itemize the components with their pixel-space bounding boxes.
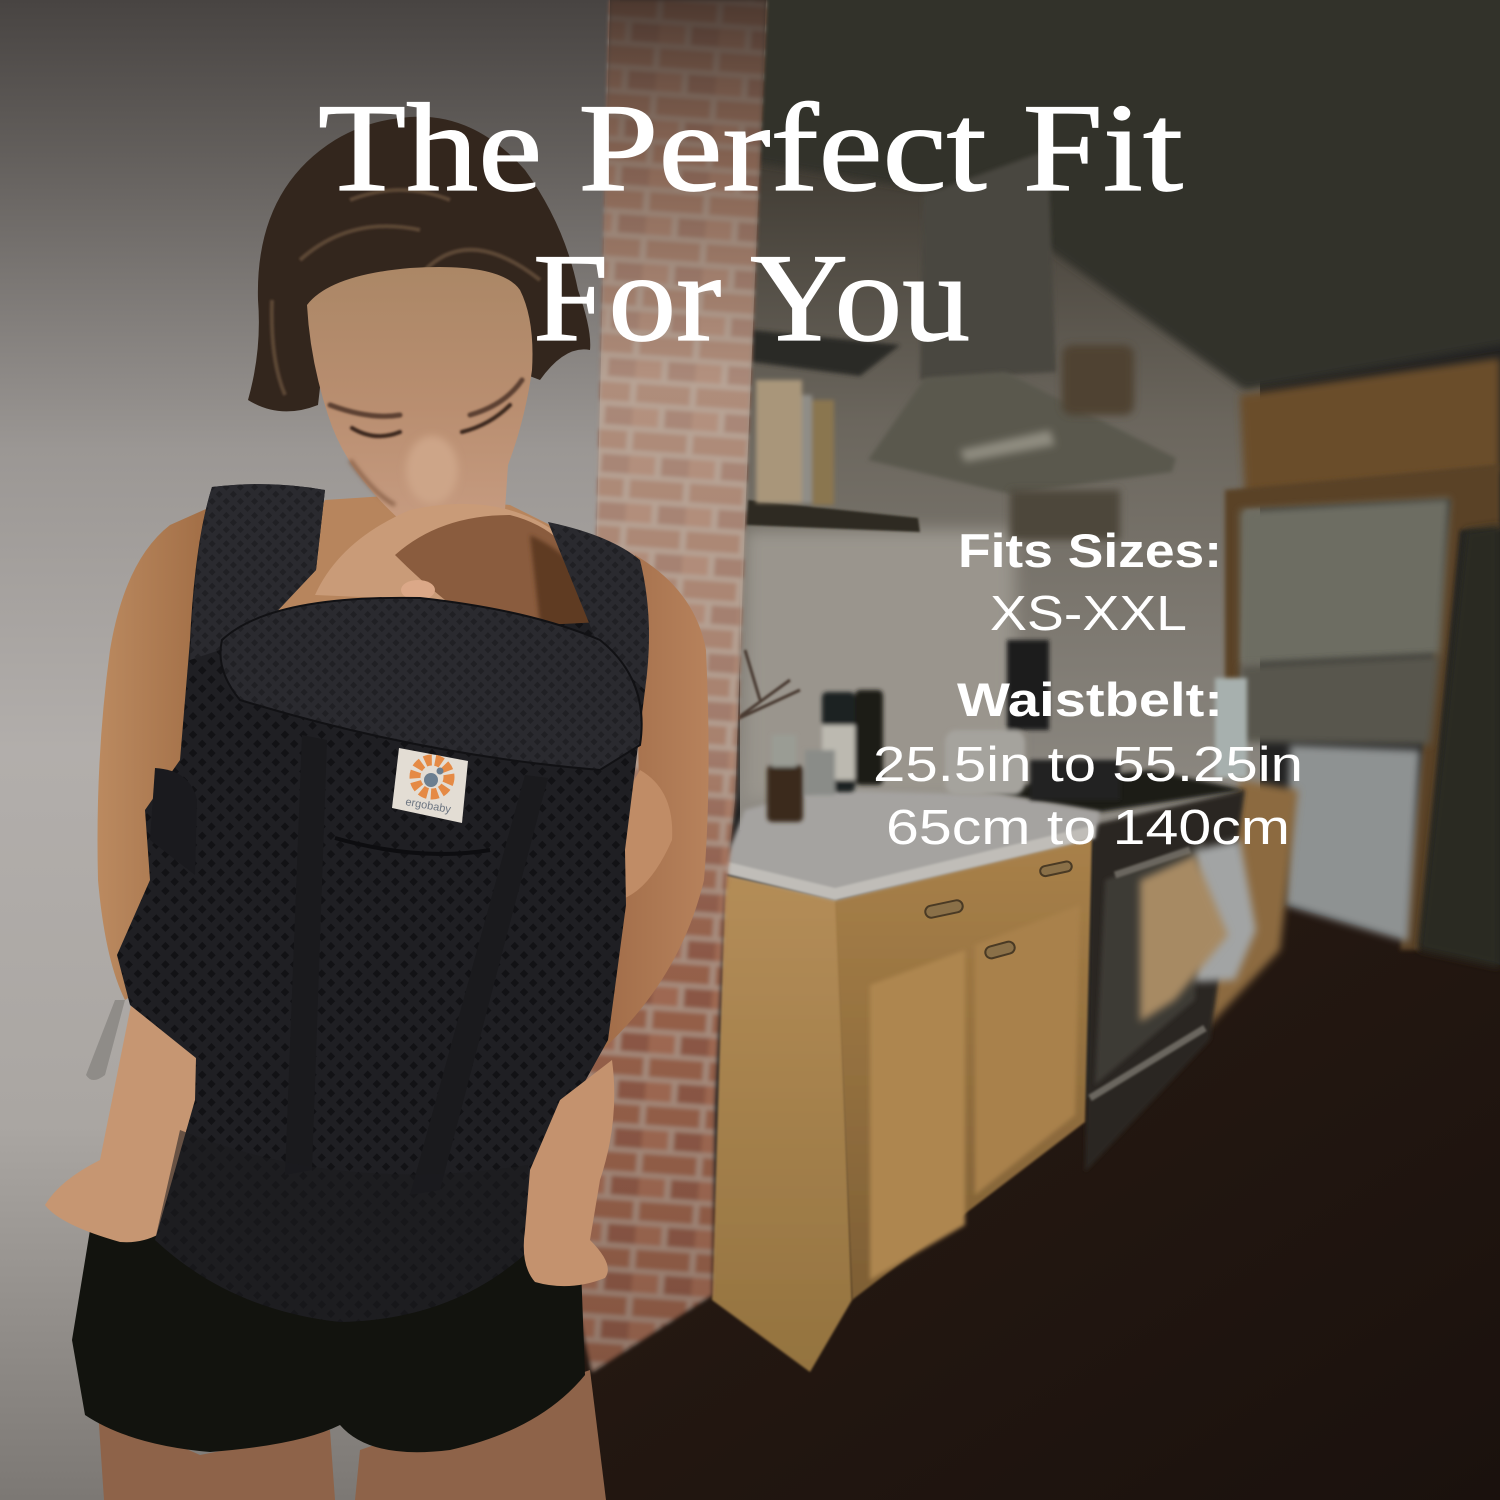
ceiling: [740, 0, 1500, 390]
baby right leg: [524, 1060, 614, 1286]
carrier body: [117, 484, 648, 1322]
carrier label: [392, 748, 468, 823]
baby skin: [315, 504, 596, 640]
brows: [330, 380, 522, 416]
baby left leg: [45, 1000, 215, 1242]
waistbelt heading: Waistbelt:: [957, 673, 1223, 726]
face: [307, 267, 532, 520]
counter edge: [720, 825, 1095, 900]
nose: [406, 436, 458, 504]
cabinet door panels: [870, 950, 965, 1280]
hand at right: [605, 770, 672, 900]
washer lower part: [1240, 655, 1440, 745]
baby head: [315, 504, 596, 640]
left strap lighter: [190, 484, 325, 660]
bottles: [767, 640, 1247, 822]
waist band shade: [155, 1130, 528, 1322]
neck and chest: [250, 495, 600, 640]
right lower cabinet: [1205, 780, 1298, 1030]
sun small dot: [436, 768, 444, 774]
head support panel: [220, 598, 642, 770]
range: [1085, 790, 1245, 1172]
pocket line: [335, 838, 490, 854]
second door: [975, 905, 1080, 1195]
stacked washer: [1240, 498, 1450, 665]
waistbelt centimetres: 65cm to 140cm: [886, 801, 1290, 855]
center seam right: [410, 775, 548, 1195]
side tie: [150, 768, 197, 875]
fridge: [1418, 525, 1500, 968]
baby hair dark: [530, 535, 596, 640]
shorts: [72, 1230, 585, 1452]
books: [756, 380, 834, 505]
towel white: [1195, 840, 1256, 982]
left wall: [0, 0, 620, 1500]
brick column: [578, 0, 766, 1372]
cabinet front: [712, 875, 852, 1372]
cabinet side: [835, 835, 1092, 1300]
fits sizes heading: Fits Sizes:: [958, 524, 1222, 577]
hood base: [868, 372, 1176, 494]
hair highlights: [272, 190, 540, 395]
tile backsplash: [745, 530, 1015, 800]
carrier: [117, 484, 649, 1322]
shelf: [746, 500, 920, 532]
kitchen wall: [740, 150, 1260, 830]
baby hair: [395, 515, 595, 640]
hood highlight: [960, 430, 1055, 462]
upper shelf: [752, 330, 900, 376]
size range: XS-XXL: [990, 587, 1187, 641]
right arm: [590, 555, 709, 1052]
legs: [98, 1370, 606, 1500]
center seam left: [285, 735, 327, 1175]
hair: [248, 117, 590, 411]
baby ear: [401, 580, 435, 600]
jaw shadow: [350, 460, 395, 505]
title line 2: For You: [533, 229, 970, 368]
jars on high shelf: [1062, 345, 1134, 415]
upper right cabinets: [1240, 358, 1500, 497]
branch in vase: [735, 650, 800, 780]
range door: [1095, 840, 1205, 1085]
cabinet frame right: [1225, 465, 1500, 950]
title line 1: The Perfect Fit: [318, 79, 1183, 218]
cooktop: [980, 770, 1245, 812]
towel patterned: [1140, 855, 1228, 1022]
right shoulder strap: [548, 522, 649, 690]
cabinet knobs: [924, 861, 1073, 960]
side buckle: [86, 1000, 125, 1080]
left arm: [98, 505, 215, 1000]
sun logo rays: [415, 760, 449, 794]
counter: [720, 790, 1100, 900]
eyes: [352, 405, 510, 436]
label tag: [392, 748, 468, 823]
brand name: ergobaby: [404, 796, 452, 816]
figure: mother and baby in carrier: [45, 117, 709, 1500]
range hood: [920, 150, 1056, 380]
floor: [575, 905, 1500, 1500]
appliance lower: [1285, 745, 1420, 942]
waistbelt inches: 25.5in to 55.25in: [873, 738, 1303, 792]
whitewash over bricks: [578, 0, 766, 1372]
size information: [873, 524, 1303, 855]
sun center: [424, 773, 438, 787]
title: [318, 79, 1183, 368]
range handles: [1090, 850, 1205, 1098]
hanging items: [1010, 490, 1120, 540]
